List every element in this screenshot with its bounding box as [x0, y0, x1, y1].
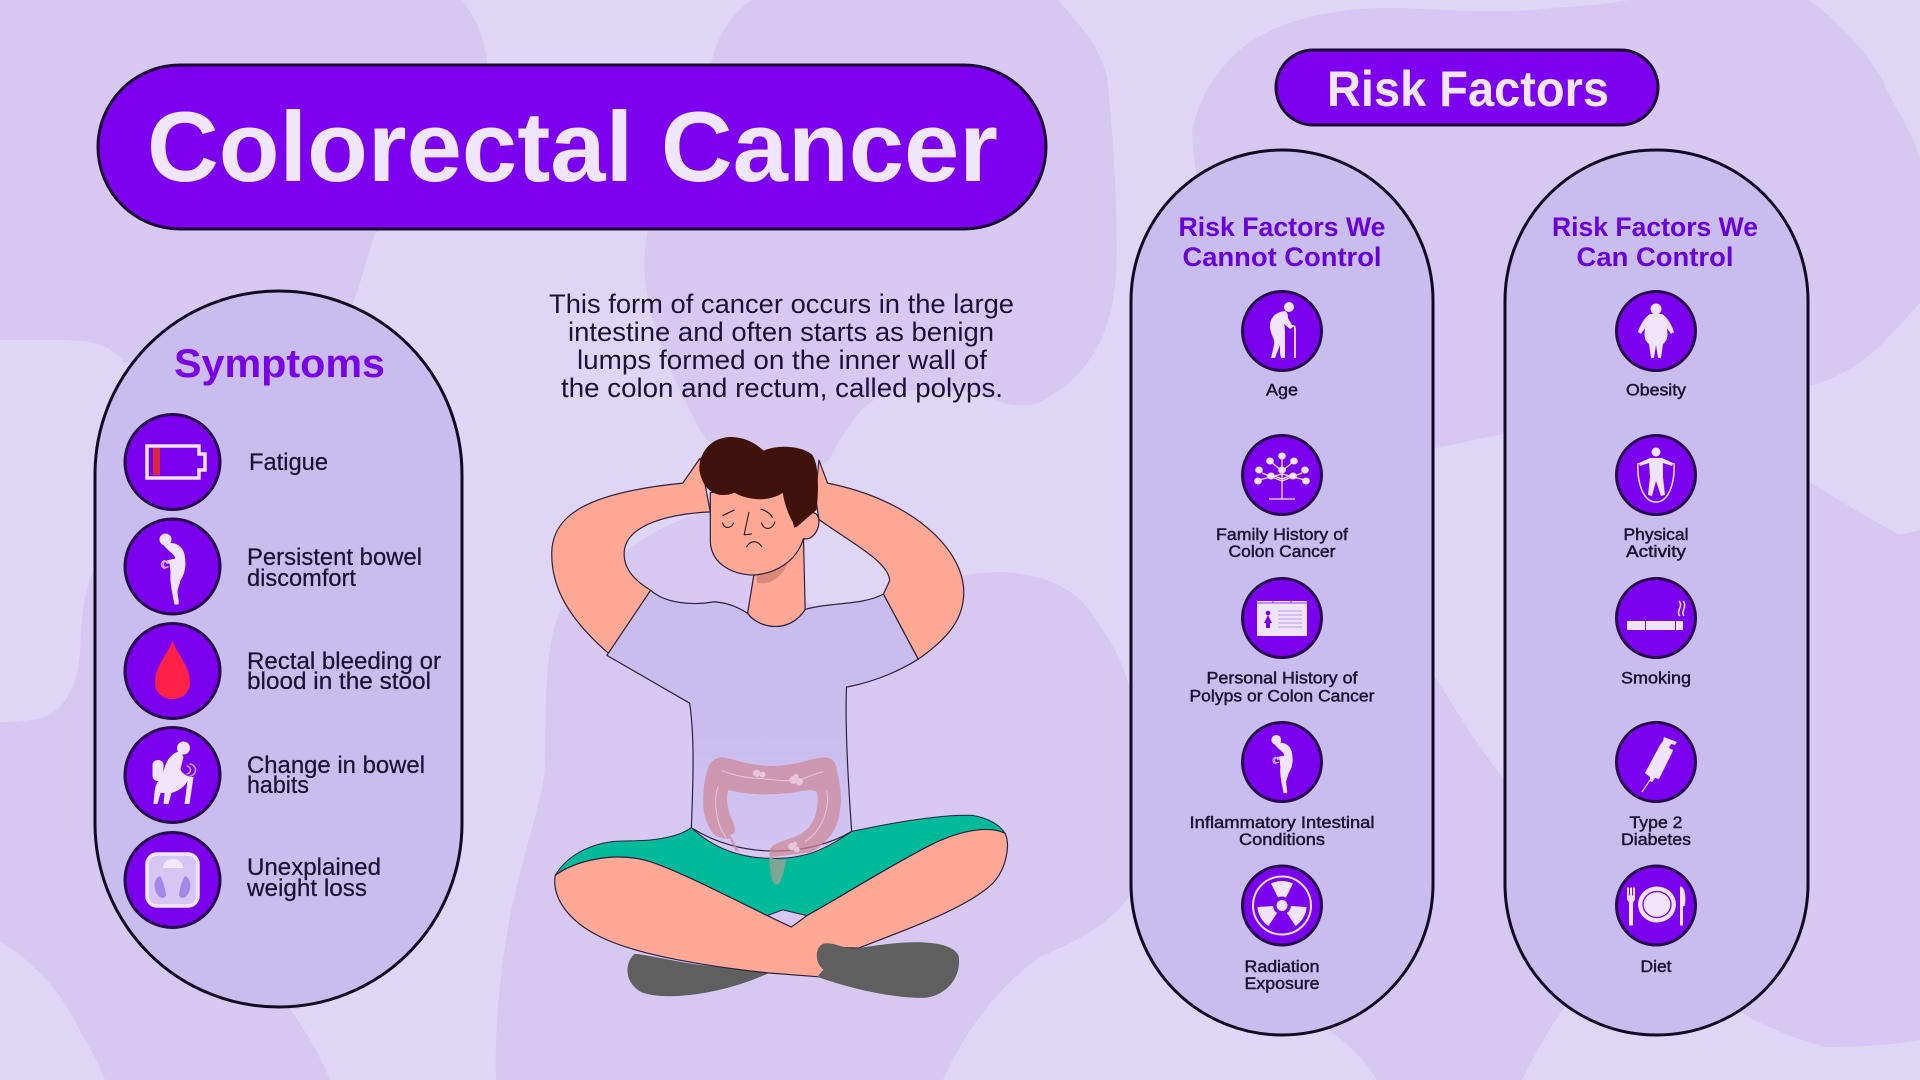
- shorts: [555, 815, 1005, 916]
- factor: radiation exposure: Exposure: [1244, 975, 1320, 993]
- symptom: unexplained weight loss: Unexplained: [247, 854, 381, 881]
- symptom: fatigue: [125, 414, 328, 510]
- heading: can control: [1552, 212, 1758, 272]
- intro text: lumps formed on the inner wall of: [577, 345, 988, 375]
- factor: personal history: Personal History of: [1206, 670, 1358, 688]
- panel: risk factors we cannot control: [1131, 150, 1433, 1035]
- symptom: unexplained weight loss: [125, 832, 381, 928]
- arms: [552, 458, 964, 659]
- heading: can control: Risk Factors We: [1552, 212, 1758, 242]
- symptom: rectal bleeding: blood in the stool: [247, 668, 431, 695]
- intro text: the colon and rectum, called polyps.: [561, 373, 1003, 403]
- factor: diet: [1616, 866, 1696, 976]
- illustration: man sitting cross-legged holding head: [552, 437, 1007, 998]
- left foot: [627, 954, 769, 996]
- symptoms heading: Symptoms: [174, 342, 385, 386]
- factor: obesity: [1616, 292, 1696, 400]
- symptom: change in bowel habits: Change in bowel: [247, 752, 425, 779]
- factor: family history: Colon Cancer: [1228, 543, 1336, 561]
- heading: cannot control: [1178, 212, 1386, 272]
- legs: [555, 829, 1007, 977]
- factor: family history: [1216, 436, 1348, 561]
- heading: cannot control: Risk Factors We: [1178, 212, 1386, 242]
- symptom: rectal bleeding: Rectal bleeding or: [247, 648, 441, 675]
- factor: personal history: [1190, 578, 1375, 706]
- factor: type 2 diabetes: [1616, 722, 1696, 849]
- intro text: [549, 289, 1014, 403]
- title banner: Colorectal Cancer: [147, 91, 998, 202]
- symptom: change in bowel habits: [125, 728, 425, 822]
- neck and head: [710, 485, 819, 626]
- factor: type 2 diabetes: Diabetes: [1621, 831, 1691, 849]
- face: [722, 509, 775, 547]
- factor: diet: Diet: [1640, 958, 1672, 976]
- panel: symptoms: [95, 291, 462, 1007]
- factor: physical activity: Physical: [1624, 526, 1688, 544]
- symptom: persistent bowel discomfort: discomfort: [247, 565, 356, 592]
- hair: [699, 437, 818, 527]
- factor: family history: Family History of: [1216, 526, 1348, 544]
- risk factors heading pill: Risk Factors: [1327, 61, 1609, 117]
- colon: [703, 757, 841, 885]
- factor: smoking: [1616, 578, 1696, 688]
- factor: age: Age: [1266, 382, 1298, 400]
- factor: smoking: Smoking: [1621, 670, 1691, 688]
- symptom: rectal bleeding: [125, 624, 441, 718]
- symptom: change in bowel habits: habits: [247, 772, 309, 799]
- intro text: intestine and often starts as benign: [568, 317, 994, 347]
- factor: obesity: Obesity: [1626, 382, 1687, 400]
- factor: personal history: Polyps or Colon Cancer: [1190, 688, 1375, 706]
- factor: inflammatory intestinal conditions: Conditions: [1239, 831, 1325, 849]
- title banner: [98, 65, 1046, 229]
- factor: inflammatory intestinal conditions: [1190, 722, 1374, 849]
- intro text: This form of cancer occurs in the large: [549, 289, 1014, 319]
- panel: risk factors we can control: [1505, 150, 1808, 1035]
- symptom: fatigue: Fatigue: [249, 449, 328, 476]
- factor: inflammatory intestinal conditions: Inflammatory Intestinal: [1190, 814, 1374, 832]
- factor: physical activity: [1616, 436, 1696, 561]
- symptom: unexplained weight loss: weight loss: [246, 875, 367, 902]
- risk factors heading pill: [1276, 50, 1658, 125]
- factor: radiation exposure: [1242, 866, 1322, 993]
- factor: physical activity: Activity: [1626, 543, 1687, 561]
- symptom: persistent bowel discomfort: Persistent bowel: [247, 544, 422, 571]
- right foot: [817, 942, 959, 998]
- factor: age: [1242, 292, 1322, 400]
- symptom: persistent bowel discomfort: [125, 519, 422, 614]
- heading: can control: Can Control: [1576, 242, 1734, 272]
- heading: cannot control: Cannot Control: [1182, 242, 1382, 272]
- factor: type 2 diabetes: Type 2: [1630, 814, 1682, 832]
- factor: radiation exposure: Radiation: [1244, 958, 1320, 976]
